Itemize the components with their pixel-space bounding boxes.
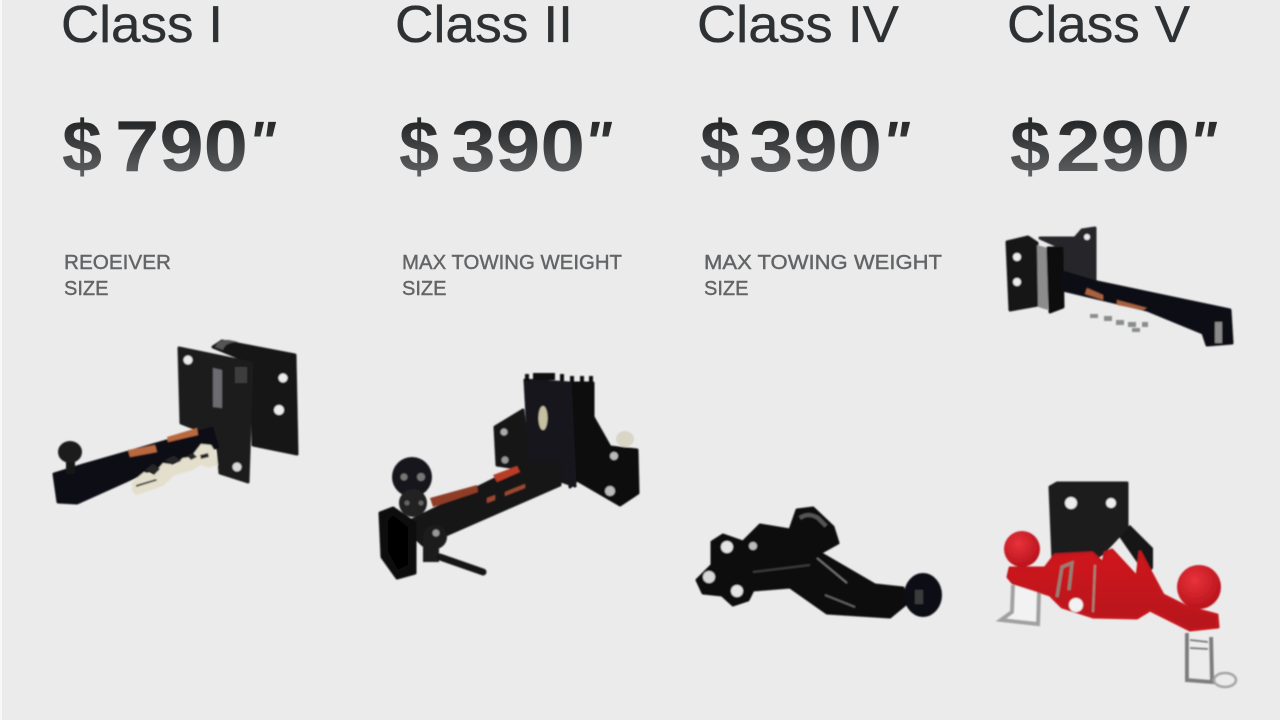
price: Class V: 290 (1056, 107, 1190, 187)
price: Class IV: 390 (749, 107, 882, 187)
icon: Class V upper hitch (1007, 228, 1232, 345)
column: Class V (1001, 0, 1236, 687)
price: Class IV: " (882, 110, 911, 175)
price: Class I: 790 (115, 107, 248, 187)
price: Class I: " (248, 110, 277, 175)
label: receiver size: REOEIVER (64, 252, 171, 274)
column: Class II (380, 0, 638, 578)
price: Class V: $ (1010, 107, 1050, 187)
icon: Class II hitch (380, 373, 638, 578)
price: Class II: 390 (451, 107, 585, 187)
icon: Class V red hitch (1001, 483, 1236, 687)
price: Class II: " (584, 110, 613, 175)
column: Class I (54, 0, 297, 503)
price: Class IV: $ (700, 107, 740, 187)
label: max towing weight size: MAX TOWING WEIGHT (704, 252, 942, 274)
price: Class II: $ (399, 107, 439, 187)
label: max towing weight size: SIZE (704, 278, 748, 300)
price: Class V: " (1189, 110, 1218, 175)
icon: Class IV hitch (697, 508, 942, 617)
label: max towing weight size: MAX TOWING WEIGHT (402, 252, 622, 274)
label: receiver size: SIZE (64, 278, 108, 300)
label: max towing weight size: SIZE (402, 278, 446, 300)
icon: Class I hitch (54, 340, 297, 503)
column: Class IV (697, 0, 942, 617)
price: Class I: $ (62, 107, 102, 187)
